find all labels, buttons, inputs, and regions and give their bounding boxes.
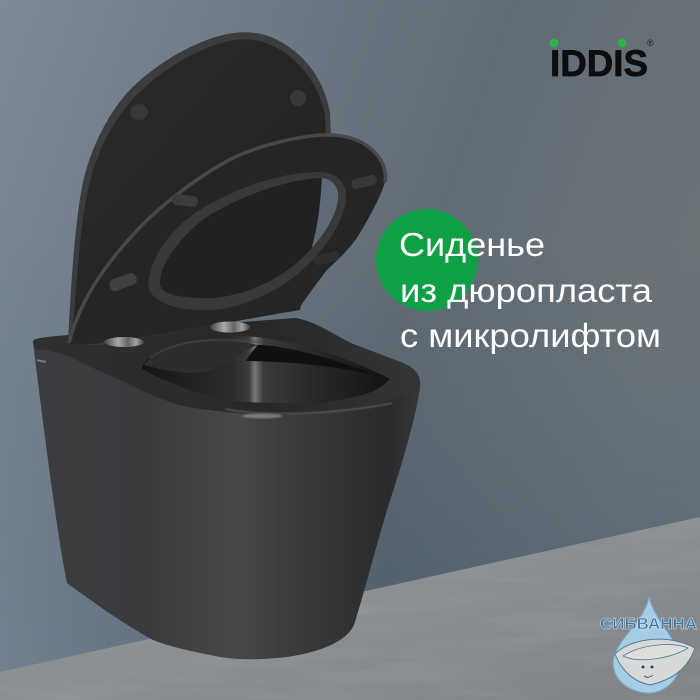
body brand mark [37, 359, 46, 363]
hinge left [104, 337, 144, 347]
lid bumper right [290, 90, 306, 106]
headline: с микролифтом [400, 317, 661, 354]
logo wordmark: IDDIS [550, 43, 648, 84]
wall seen through seat [312, 178, 338, 248]
seat ring [148, 172, 346, 310]
seat bumper top [171, 194, 198, 207]
toilet bowl opening [142, 336, 390, 403]
watermark: Sibvanna logo [600, 597, 697, 693]
hinge right [210, 322, 250, 332]
shelf highlight [150, 340, 262, 358]
lid bumper left [130, 104, 148, 120]
registered mark: ® [647, 38, 654, 48]
headline [399, 226, 661, 354]
bathtub rim [623, 645, 688, 660]
face smile [644, 675, 653, 677]
seat bumper lower right [313, 250, 341, 266]
toilet lid [68, 32, 331, 345]
bowl front shelf [144, 340, 258, 373]
headline: Сиденье [399, 226, 545, 263]
brand name: СИБВАННА [600, 616, 697, 633]
water drop [613, 597, 680, 693]
rear dark recess [246, 345, 387, 379]
IDDIS logo [550, 38, 654, 84]
green accent circle [376, 209, 478, 311]
seat outer edge highlight [69, 135, 385, 343]
body highlight [242, 414, 282, 418]
floor [0, 510, 700, 700]
face eyes [642, 666, 644, 668]
toilet body [33, 318, 420, 659]
rim highlight [225, 403, 392, 414]
logo green dots [550, 38, 558, 48]
seat bumper left [108, 272, 138, 292]
bathtub [615, 639, 695, 685]
headline: из дюропласта [400, 272, 653, 309]
seat bumper right [350, 174, 378, 190]
toilet rim [33, 318, 420, 415]
toilet [33, 32, 420, 659]
seat opening [160, 178, 338, 298]
toilet seat [68, 135, 385, 345]
